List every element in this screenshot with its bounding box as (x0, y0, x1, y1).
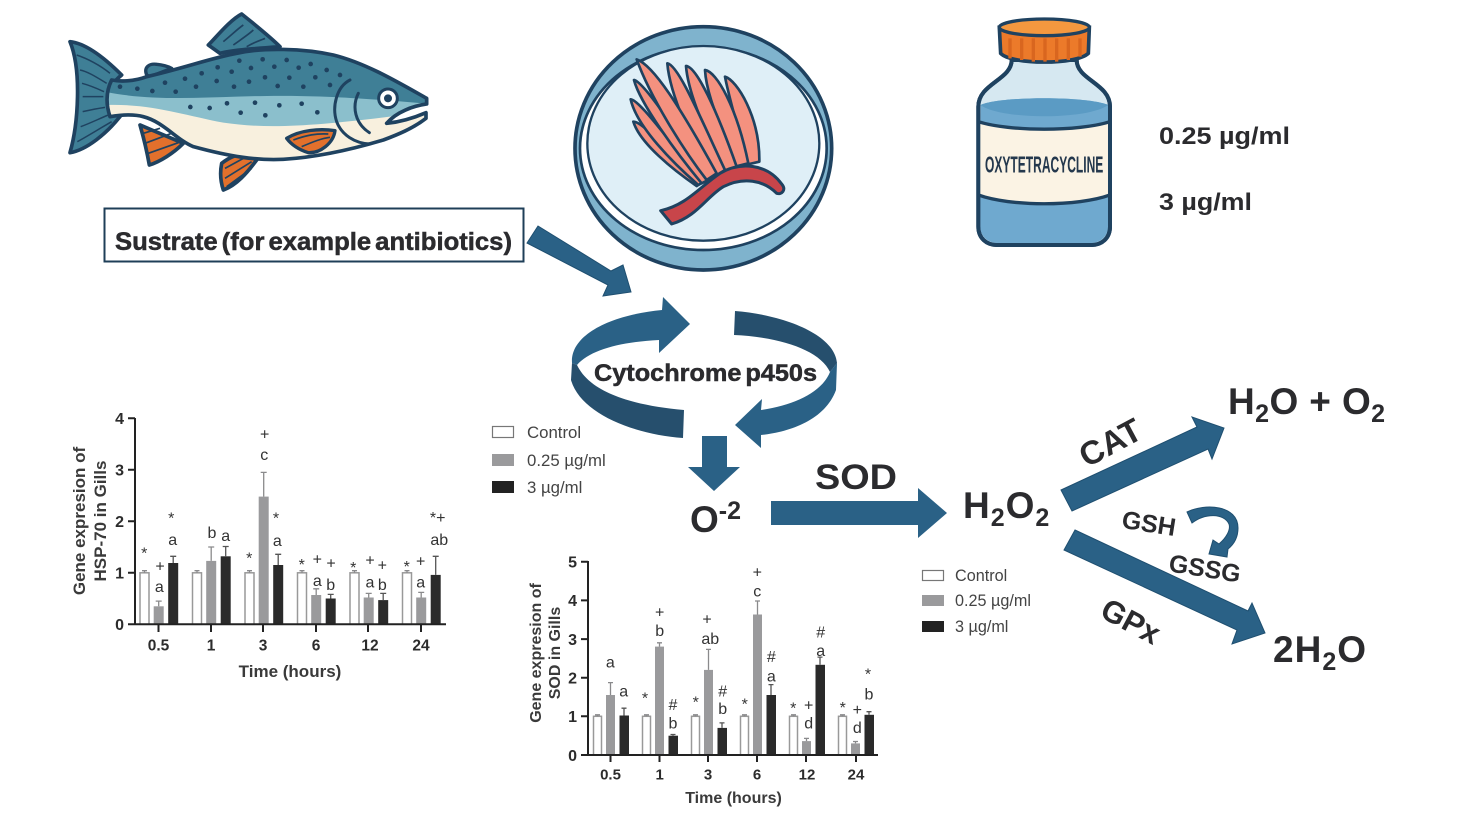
SOD significance letters: + (753, 564, 762, 581)
HSP-70 x axis title: Time (hours) (239, 662, 341, 681)
SOD x tick labels: 3 (704, 766, 712, 784)
HSP-70 significance letters: * (273, 510, 279, 528)
label: water: 2H (1273, 629, 1322, 670)
liquid surface (981, 98, 1108, 116)
SOD 0.25 bars (606, 614, 860, 755)
body outline (107, 49, 427, 160)
HSP-70 significance letters: c (260, 447, 268, 464)
SOD significance letters: b (865, 686, 874, 704)
SOD significance letters: + (804, 698, 813, 715)
label: GSSG: GSSG (1167, 550, 1243, 588)
adipose fin (146, 64, 172, 77)
label: hydrogen peroxide: O (1006, 485, 1035, 526)
HSP-70 significance letters: b (378, 577, 387, 594)
arrow: GPx (1064, 530, 1265, 644)
SOD significance letters: + (702, 611, 712, 628)
HSP-70 x tick labels (148, 638, 430, 654)
SOD y axis title second line: SOD in Gills (547, 607, 564, 699)
HSP-70 y tick labels: 3 (115, 462, 124, 480)
SOD significance letters: # (669, 697, 678, 714)
label: cytochrome p450s: Cytochrome p450s (594, 360, 817, 387)
gill filaments (631, 59, 759, 186)
label: superoxide: O (690, 499, 719, 540)
SOD y tick labels: 0 (568, 748, 577, 765)
legend: SOD chart: Control (955, 567, 1007, 585)
HSP-70 x tick labels: 6 (312, 638, 321, 654)
dish inner surface (587, 46, 819, 241)
gill cover (335, 80, 370, 144)
SOD significance letters: d (804, 716, 813, 732)
dorsal fin rays (223, 25, 265, 47)
HSP-70 significance letters: a (416, 574, 425, 591)
dish outer wall (575, 27, 832, 270)
label: water and oxygen: 2 (1255, 400, 1269, 428)
HSP-70 significance letters: + (155, 559, 165, 576)
SOD significance letters: c (753, 583, 761, 600)
arrow: GSH to GSSG (1187, 507, 1238, 557)
HSP-70 significance letters: * (299, 557, 305, 574)
fish body (108, 51, 425, 158)
vial outline (978, 60, 1110, 245)
HSP-70 significance letters: ab (430, 532, 448, 549)
HSP-70 significance letters: b (208, 525, 217, 542)
SOD significance letters: + (853, 702, 862, 719)
cycle arrow: lower left band (571, 363, 684, 438)
ventral fin rays (143, 128, 252, 187)
icon: petri dish with gill (575, 27, 832, 270)
SOD significance letters: a (619, 684, 628, 700)
SOD significance letters: b (669, 716, 678, 732)
legend: HSP-70 chart (492, 423, 606, 497)
vial glass (978, 60, 1110, 245)
legend: HSP-70 chart: 0.25 µg/ml (527, 451, 606, 470)
substrate box (104, 208, 524, 262)
vial cap (999, 19, 1089, 62)
SOD y tick labels: 1 (568, 709, 577, 726)
cytochrome cycle arrows (571, 297, 837, 448)
SOD significance letters: a (816, 643, 825, 660)
HSP-70 significance letters: + (313, 551, 322, 568)
dose: 0.25 µg/ml: 0.25 µg/ml (1159, 123, 1290, 150)
cycle arrow: upper left (572, 297, 690, 365)
HSP-70 significance letters: + (326, 555, 336, 572)
HSP-70 y tick labels: 4 (115, 411, 124, 428)
bar chart: SOD expression (528, 554, 878, 807)
bar chart: HSP-70 expression (70, 411, 448, 681)
HSP-70 y tick labels (115, 411, 124, 634)
HSP-70 x tick labels: 1 (207, 638, 216, 654)
SOD significance letters: # (767, 649, 776, 666)
dorsal fin (208, 14, 280, 53)
HSP-70 significance letters: *+ (430, 510, 445, 527)
SOD y tick labels: 5 (568, 554, 577, 572)
legend: SOD chart: 0.25 µg/ml (955, 592, 1031, 610)
SOD significance letters: # (816, 624, 825, 641)
anal fin (221, 153, 257, 190)
label: water: O (1337, 629, 1367, 670)
HSP-70 significance letters: a (221, 528, 230, 545)
SOD x tick labels: 6 (753, 766, 761, 784)
HSP-70 significance letters: + (365, 552, 375, 569)
SOD significance letters: * (840, 700, 846, 717)
SOD significance letters: a (767, 668, 776, 686)
label: SOD: SOD (815, 458, 897, 497)
label: hydrogen peroxide: H (963, 485, 991, 526)
SOD significance letters: + (655, 604, 664, 621)
HSP-70 significance letters: a (155, 579, 164, 596)
arrow: down to superoxide (688, 436, 740, 491)
tail fin (70, 42, 122, 153)
HSP-70 significance letters: * (404, 559, 410, 576)
HSP-70 significance letters: * (350, 560, 356, 577)
SOD significance letters: ab (701, 631, 719, 648)
HSP-70 significance letters (141, 426, 448, 596)
SOD x tick labels: 1 (656, 766, 664, 784)
SOD y tick labels (568, 554, 577, 765)
HSP-70 control bars (140, 573, 412, 624)
substrate box: Sustrate (for example antibiotics) (115, 228, 512, 256)
SOD x tick labels: 12 (799, 766, 815, 784)
SOD 3 bars (620, 665, 874, 755)
fish eye (379, 89, 397, 108)
SOD significance letters: * (693, 694, 699, 712)
HSP-70 axes (128, 418, 446, 632)
SOD significance letters: # (718, 683, 727, 700)
SOD significance letters: a (606, 654, 615, 672)
HSP-70 significance letters: a (366, 574, 375, 591)
HSP-70 y tick labels: 2 (115, 514, 124, 531)
HSP-70 significance letters: + (260, 426, 269, 443)
legend: SOD chart (922, 567, 1031, 636)
icon: oxytetracycline vial (978, 19, 1110, 245)
SOD significance letters: b (655, 623, 664, 640)
HSP-70 x tick labels: 12 (361, 638, 379, 654)
arrow: substrate to cytochrome (527, 226, 631, 296)
label: GSH: GSH (1120, 506, 1178, 542)
SOD significance letters: * (865, 666, 871, 684)
label: water and oxygen: H (1228, 381, 1255, 422)
label: GPx: GPx (1095, 591, 1167, 652)
HSP-70 significance letters: a (168, 532, 177, 549)
gill arch (661, 166, 784, 224)
HSP-70 significance letters: + (416, 553, 425, 570)
HSP-70 significance letters: b (326, 577, 335, 594)
HSP-70 significance letters: * (246, 550, 252, 568)
HSP-70 y axis title: Gene expresion of (70, 447, 89, 595)
icon: salmon fish (70, 14, 433, 190)
HSP-70 y axis title second line: HSP-70 in Gills (91, 461, 110, 581)
cycle arrow: lower right (735, 363, 837, 448)
HSP-70 x tick labels: 3 (259, 638, 268, 654)
label: water and oxygen: 2 (1371, 400, 1385, 428)
HSP-70 0.25 bars (154, 497, 426, 624)
SOD x tick labels (600, 766, 865, 784)
SOD significance letters: d (853, 720, 862, 737)
SOD significance letters: * (742, 696, 748, 714)
SOD x axis title: Time (hours) (685, 790, 782, 807)
tail fin rays (77, 55, 112, 142)
HSP-70 significance letters: a (313, 573, 322, 590)
arrow: CAT (1061, 417, 1224, 511)
SOD significance letters: b (718, 701, 727, 718)
legend: HSP-70 chart: 3 µg/ml (527, 478, 582, 497)
pectoral fin rays (293, 134, 330, 147)
legend: SOD chart: 3 µg/ml (955, 618, 1008, 636)
dish white rim (580, 47, 827, 250)
HSP-70 significance letters: a (273, 533, 282, 550)
vial liquid (980, 98, 1108, 243)
HSP-70 significance letters: * (141, 546, 147, 562)
HSP-70 error bars (142, 472, 424, 606)
dose: 3 µg/ml: 3 µg/ml (1159, 189, 1252, 216)
HSP-70 3 bars (168, 556, 441, 624)
SOD x tick labels: 24 (848, 766, 865, 784)
HSP-70 significance letters: * (168, 510, 174, 528)
SOD significance letters: * (790, 700, 796, 718)
SOD control bars (594, 716, 846, 755)
SOD y tick labels: 2 (568, 670, 577, 688)
label: hydrogen peroxide: 2 (991, 504, 1006, 532)
rear ventral fin (140, 125, 183, 165)
arrow: SOD (771, 488, 947, 538)
HSP-70 y tick labels: 1 (115, 566, 124, 582)
legend: HSP-70 chart: Control (527, 423, 581, 442)
label: water and oxygen: O + O (1269, 381, 1371, 422)
vial label (978, 122, 1110, 204)
label: superoxide: -2 (719, 497, 741, 525)
SOD y tick labels: 4 (568, 593, 577, 610)
SOD error bars (595, 601, 858, 743)
HSP-70 x tick labels: 0.5 (148, 638, 170, 654)
SOD y tick labels: 3 (568, 632, 577, 649)
pectoral fin (287, 130, 335, 153)
fish spots (118, 57, 342, 118)
label: water: 2 (1322, 648, 1337, 676)
SOD significance letters (606, 564, 874, 737)
label: CAT: CAT (1073, 411, 1148, 474)
vial label text: OXYTETRACYCLINE (985, 152, 1103, 178)
HSP-70 significance letters: + (378, 558, 387, 575)
HSP-70 y tick labels: 0 (115, 617, 124, 634)
SOD significance letters: * (642, 690, 648, 708)
label: hydrogen peroxide: 2 (1035, 504, 1050, 532)
SOD x tick labels: 0.5 (600, 766, 621, 784)
SOD y axis title: Gene expresion of (528, 583, 545, 723)
HSP-70 x tick labels: 24 (412, 638, 430, 654)
cycle arrow: upper right band (734, 311, 837, 372)
SOD axes (581, 561, 878, 762)
